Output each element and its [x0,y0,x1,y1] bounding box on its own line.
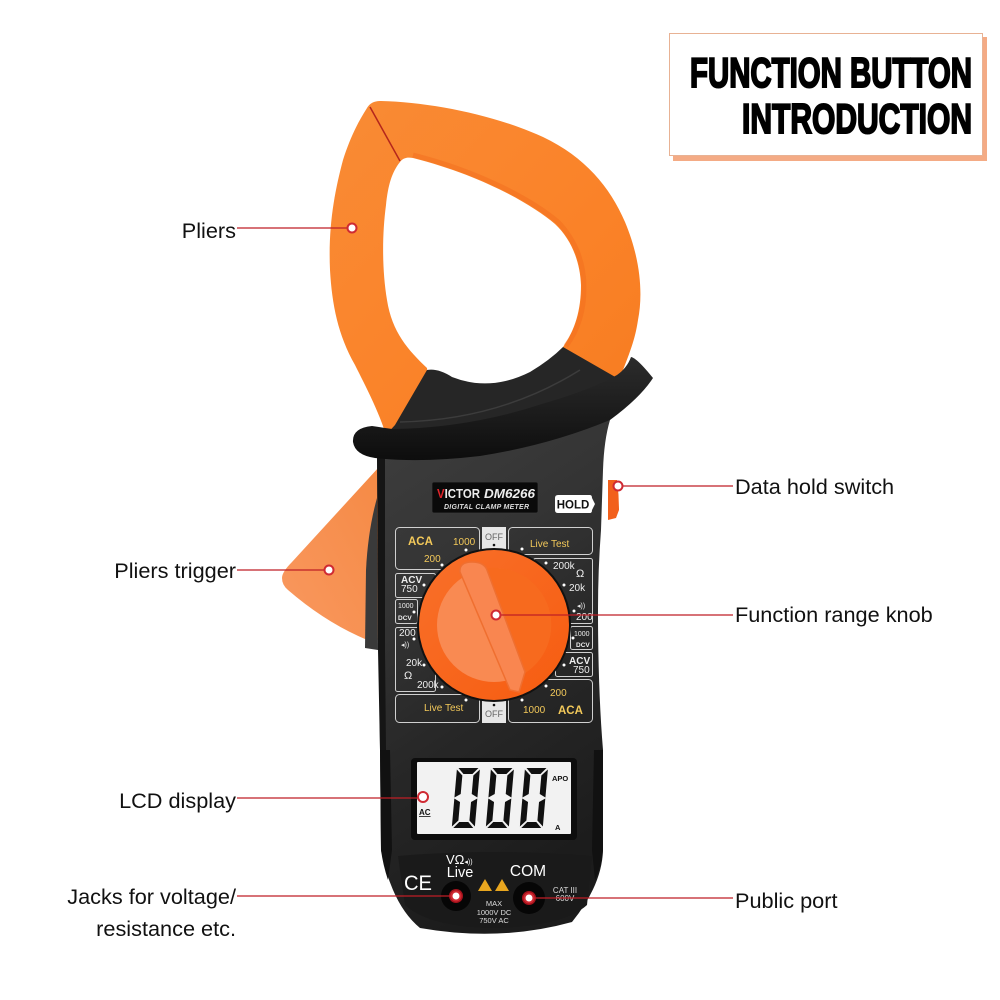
range markings: DCV [398,615,412,622]
callout: jacks: Jacks for voltage/ [67,884,237,909]
pliers jaws [330,101,640,440]
range markings: 750 [401,584,418,595]
range markings: ACV [401,575,422,586]
range markings: 200 [424,554,441,565]
range markings: 1000 [398,603,414,610]
title text [690,49,972,142]
range markings: 200 [399,628,416,639]
lcd display: APO [552,774,568,783]
pliers trigger shape [282,467,379,640]
range markings: DCV [576,642,590,649]
range markings: ACA [558,705,583,717]
callout: jacks [67,884,460,941]
selector panels [396,528,592,722]
left dark edge [377,455,386,750]
lcd digit 3 [520,768,548,828]
off tabs [482,527,506,723]
range markings: 1000 [523,705,546,716]
bumper [353,357,653,460]
port panel [398,852,592,928]
range markings: Live Test [424,703,464,714]
callout: data hold switch [614,474,894,499]
callout: jacks: resistance etc. [96,916,236,941]
black jaw collar [385,347,617,450]
range markings: ACV [569,656,590,667]
range markings: 20k [569,583,586,594]
brand plate [432,482,538,513]
brand plate: VICTOR [437,486,481,501]
jaw inner rim shading [413,155,584,346]
callout: public port: Public port [735,888,837,913]
callout: pliers trigger [114,558,334,583]
callout: pliers: Pliers [182,218,236,243]
function range knob [417,548,571,702]
port panel: MAX [486,899,502,908]
callout: pliers trigger: Pliers trigger [114,558,236,583]
lcd digit 1 [452,768,480,828]
meter body [377,420,610,934]
brand plate: DIGITAL CLAMP METER [444,504,529,511]
hold badge: HOLD [557,500,589,512]
port panel: VΩ◂)) [446,852,473,867]
data hold switch [608,480,619,520]
side strip [365,498,378,650]
off tabs: OFF [485,709,503,719]
range markings [398,536,593,717]
lcd display [411,758,577,840]
range markings: 200k [553,561,576,572]
off tabs: OFF [485,532,503,542]
range markings: Ω [404,670,412,682]
range markings: ◂)) [401,642,409,649]
range markings: Live Test [530,539,570,550]
range markings: ACA [408,536,433,548]
range markings: 1000 [453,537,476,548]
port panel: Live [447,865,473,881]
port panel: CAT III [553,886,577,895]
range markings: 200 [576,612,593,623]
lcd display: AC [419,808,431,817]
callout: lcd display: LCD display [119,788,236,813]
range markings: 20k [406,658,423,669]
range dots [412,548,576,702]
clamp meter [282,101,653,934]
range markings: ◂)) [577,603,585,610]
range markings: 200k [417,680,440,691]
title box [670,34,987,161]
range markings: 1000 [574,631,590,638]
callout: function range knob [492,602,933,627]
callout: function range knob: Function range knob [735,602,933,627]
callout: public port [524,888,837,913]
range markings: 200 [550,688,567,699]
lcd display: A [555,823,561,832]
range markings: 750 [573,665,590,676]
lower grips [380,750,603,880]
callout: data hold switch: Data hold switch [735,474,894,499]
callout: lcd display [119,788,428,813]
lcd digit 2 [486,768,514,828]
port panel: CE [404,872,432,895]
port panel: 600V [556,894,575,903]
brand plate: DM6266 [484,486,536,501]
hold badge [555,495,595,513]
port panel: 750V AC [479,916,509,925]
port panel: COM [510,863,546,880]
range markings: Ω [576,568,584,580]
port panel: 1000V DC [477,908,512,917]
knob pointer [460,562,525,692]
callout: pliers [182,218,356,243]
